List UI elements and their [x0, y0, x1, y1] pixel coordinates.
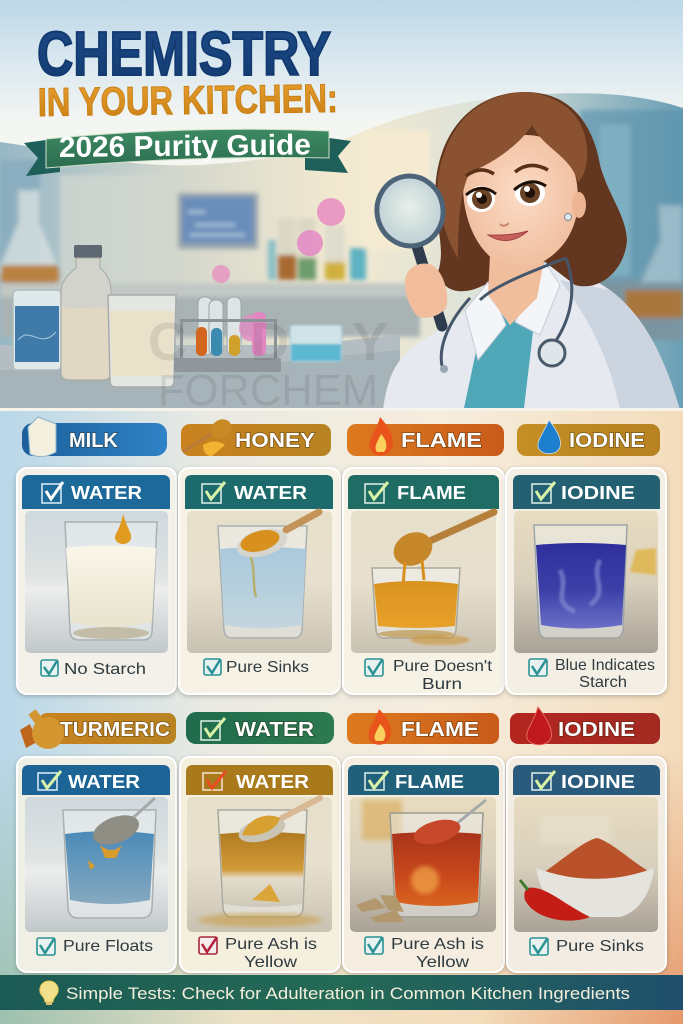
left eye — [466, 186, 496, 212]
card 2: honey water test — [179, 468, 340, 694]
milk bottle — [61, 245, 111, 380]
caption — [365, 936, 484, 971]
hair back — [435, 92, 627, 291]
caption: Yellow — [416, 954, 470, 971]
hand — [405, 264, 447, 318]
spoon — [282, 798, 320, 818]
pill: honey — [181, 415, 331, 456]
lab background — [0, 90, 683, 410]
header: FLAME — [395, 772, 464, 792]
neck — [488, 255, 545, 325]
photo — [187, 511, 332, 653]
spoon — [125, 798, 155, 825]
nose — [500, 223, 509, 226]
header — [348, 765, 499, 795]
header — [22, 765, 170, 795]
ear and earring — [564, 192, 586, 220]
ribbon banner — [24, 129, 351, 176]
pill: iodine — [517, 420, 660, 456]
card 4: iodine test — [506, 468, 666, 694]
hero bottom edge — [0, 408, 683, 411]
pill: iodine: IODINE — [558, 719, 635, 741]
powder and bowl — [543, 838, 650, 879]
caption: Blue Indicates — [555, 657, 655, 674]
header — [513, 765, 660, 795]
header — [185, 475, 333, 509]
pill: iodine — [510, 707, 660, 745]
caption: Yellow — [244, 954, 298, 971]
caption — [199, 936, 317, 971]
row 2 pills — [20, 707, 660, 749]
header: WATER — [71, 483, 142, 503]
card 5: turmeric water test — [17, 757, 176, 972]
row 1 pills — [22, 415, 660, 457]
caption: Pure Doesn't — [393, 658, 493, 675]
pill: honey: HONEY — [235, 430, 316, 452]
photo — [351, 511, 496, 653]
caption: Starch — [579, 674, 627, 691]
shelf tubes — [268, 218, 366, 280]
caption: Pure Ash is — [391, 936, 484, 953]
counter — [0, 335, 400, 408]
pill: turmeric: TURMERIC — [60, 719, 170, 741]
caption — [365, 658, 493, 693]
header — [348, 475, 499, 509]
pill: water: WATER — [235, 719, 315, 741]
photo — [514, 797, 658, 932]
honey dipper — [432, 512, 494, 540]
flask right — [640, 205, 683, 283]
header — [186, 765, 333, 795]
chest piece — [440, 340, 565, 373]
stethoscope — [441, 258, 572, 366]
heading: in your kitchen: IN YOUR KITCHEN: — [38, 77, 338, 125]
hair front — [438, 92, 587, 258]
shelf — [0, 283, 420, 297]
header: FLAME — [397, 483, 466, 503]
pill: milk — [22, 417, 167, 457]
watermark — [150, 322, 387, 406]
scrub top — [464, 314, 533, 408]
ribbon banner: 2026 Purity Guide — [59, 129, 311, 164]
pill: turmeric — [20, 712, 176, 749]
photo — [350, 797, 496, 932]
scientist character — [371, 92, 680, 410]
caption: Pure Ash is — [225, 936, 317, 953]
caption: No Starch — [64, 661, 146, 678]
pink circles — [212, 198, 345, 283]
collar — [465, 262, 560, 360]
pill: flame — [347, 417, 504, 456]
card 3: honey flame test — [343, 468, 504, 694]
pill: flame: FLAME — [401, 719, 479, 741]
hero illustration — [0, 0, 683, 415]
pill: milk: MILK — [69, 430, 118, 452]
ash chunks — [356, 895, 404, 922]
photo — [25, 511, 168, 653]
chili — [524, 888, 590, 921]
glass of blue water — [13, 290, 61, 370]
header: WATER — [68, 772, 140, 792]
small beaker — [290, 325, 342, 362]
title — [24, 20, 351, 176]
caption: Pure Sinks — [556, 938, 644, 955]
card 7: chili flame test — [343, 757, 504, 972]
caption: Pure Floats — [63, 938, 153, 955]
page background — [0, 411, 683, 1024]
honey drop — [115, 514, 131, 544]
right eye — [514, 180, 546, 206]
heading: chemistry: CHEMISTRY — [37, 20, 331, 89]
caption — [529, 657, 655, 691]
test tube rack — [174, 297, 281, 372]
photo — [25, 797, 168, 932]
card 8: chili iodine test — [507, 757, 666, 972]
pill: water — [186, 712, 334, 744]
magnifying glass — [371, 171, 449, 326]
photo — [514, 511, 658, 653]
glass of milk — [108, 295, 176, 387]
mouth — [488, 231, 528, 241]
pill: iodine: IODINE — [569, 430, 645, 452]
caption: Pure Sinks — [226, 659, 309, 676]
watermark: FORCHEM — [158, 366, 378, 415]
eyebrows — [466, 165, 548, 176]
footer banner: Simple Tests: Check for Adulteration in Common Kitchen Ingredients — [66, 984, 630, 1003]
face — [463, 135, 578, 268]
header — [22, 475, 170, 509]
header: IODINE — [561, 483, 635, 503]
pill: flame: FLAME — [401, 430, 482, 452]
monitor — [178, 193, 258, 249]
card 1: milk water test — [17, 468, 176, 694]
card 6: turmeric water test — [180, 757, 340, 972]
icon: light bulb — [40, 981, 58, 1005]
watermark: C D Y — [148, 312, 388, 372]
pill: flame — [347, 709, 499, 745]
caption — [530, 938, 644, 955]
header — [513, 475, 660, 509]
header: IODINE — [561, 772, 635, 792]
header: WATER — [236, 772, 309, 792]
photo — [187, 797, 332, 932]
lab coat — [383, 255, 680, 410]
header: WATER — [234, 483, 307, 503]
spoon — [455, 800, 486, 825]
flask left — [0, 190, 60, 283]
footer banner — [0, 975, 683, 1010]
caption — [41, 660, 146, 678]
spoon — [286, 512, 319, 530]
caption: Burn — [422, 676, 462, 693]
